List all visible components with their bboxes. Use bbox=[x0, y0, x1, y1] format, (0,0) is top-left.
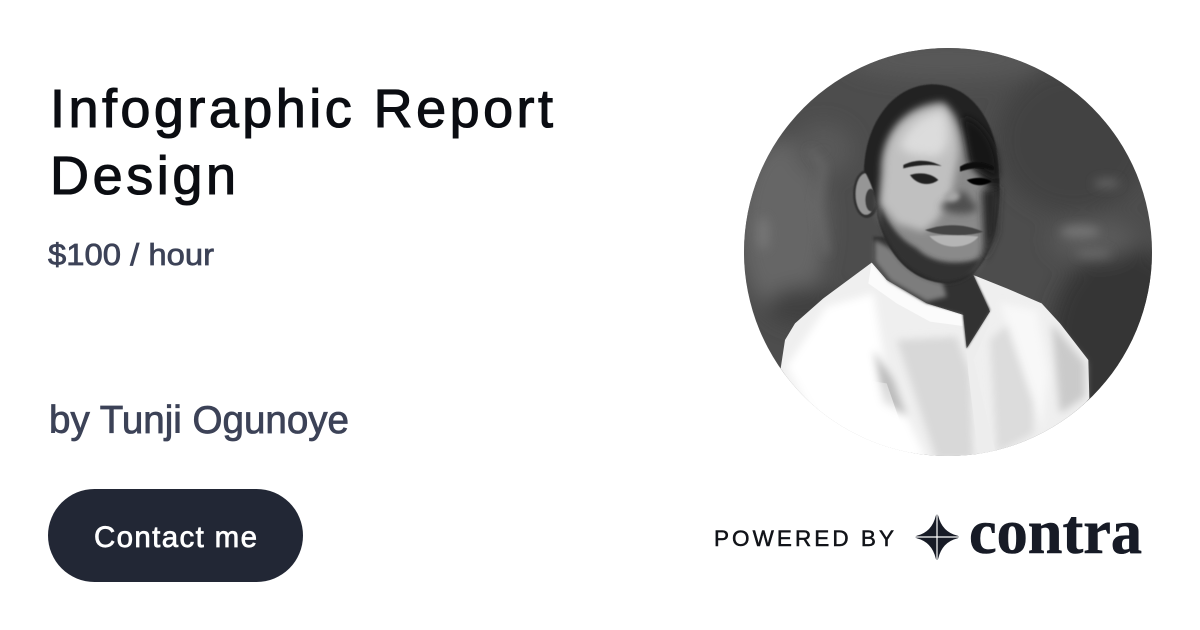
icon: four-point star bbox=[916, 515, 959, 559]
price: $100 / hour bbox=[48, 238, 214, 272]
author name: by Tunji Ogunoye bbox=[49, 399, 349, 442]
contra logo bbox=[916, 496, 1142, 567]
beard bbox=[880, 207, 982, 283]
lips bbox=[925, 225, 983, 247]
title bbox=[50, 79, 553, 206]
contact button bbox=[48, 489, 303, 582]
placket bbox=[968, 312, 994, 454]
eyes and brows bbox=[903, 161, 993, 185]
shirt bbox=[780, 262, 1091, 456]
contact button: Contact me bbox=[94, 521, 257, 554]
neck bbox=[873, 237, 993, 348]
face mid tone bbox=[879, 102, 995, 275]
ear bbox=[852, 170, 877, 218]
head and hair bbox=[864, 84, 999, 283]
face light side bbox=[881, 106, 959, 232]
wordmark: contra bbox=[969, 496, 1142, 567]
nose bbox=[940, 190, 978, 214]
title: Infographic Report bbox=[50, 79, 553, 139]
powered by label: POWERED BY bbox=[714, 526, 894, 551]
shadow side of face bbox=[962, 117, 998, 180]
title: Design bbox=[50, 146, 236, 206]
portrait photo bbox=[744, 48, 1152, 456]
